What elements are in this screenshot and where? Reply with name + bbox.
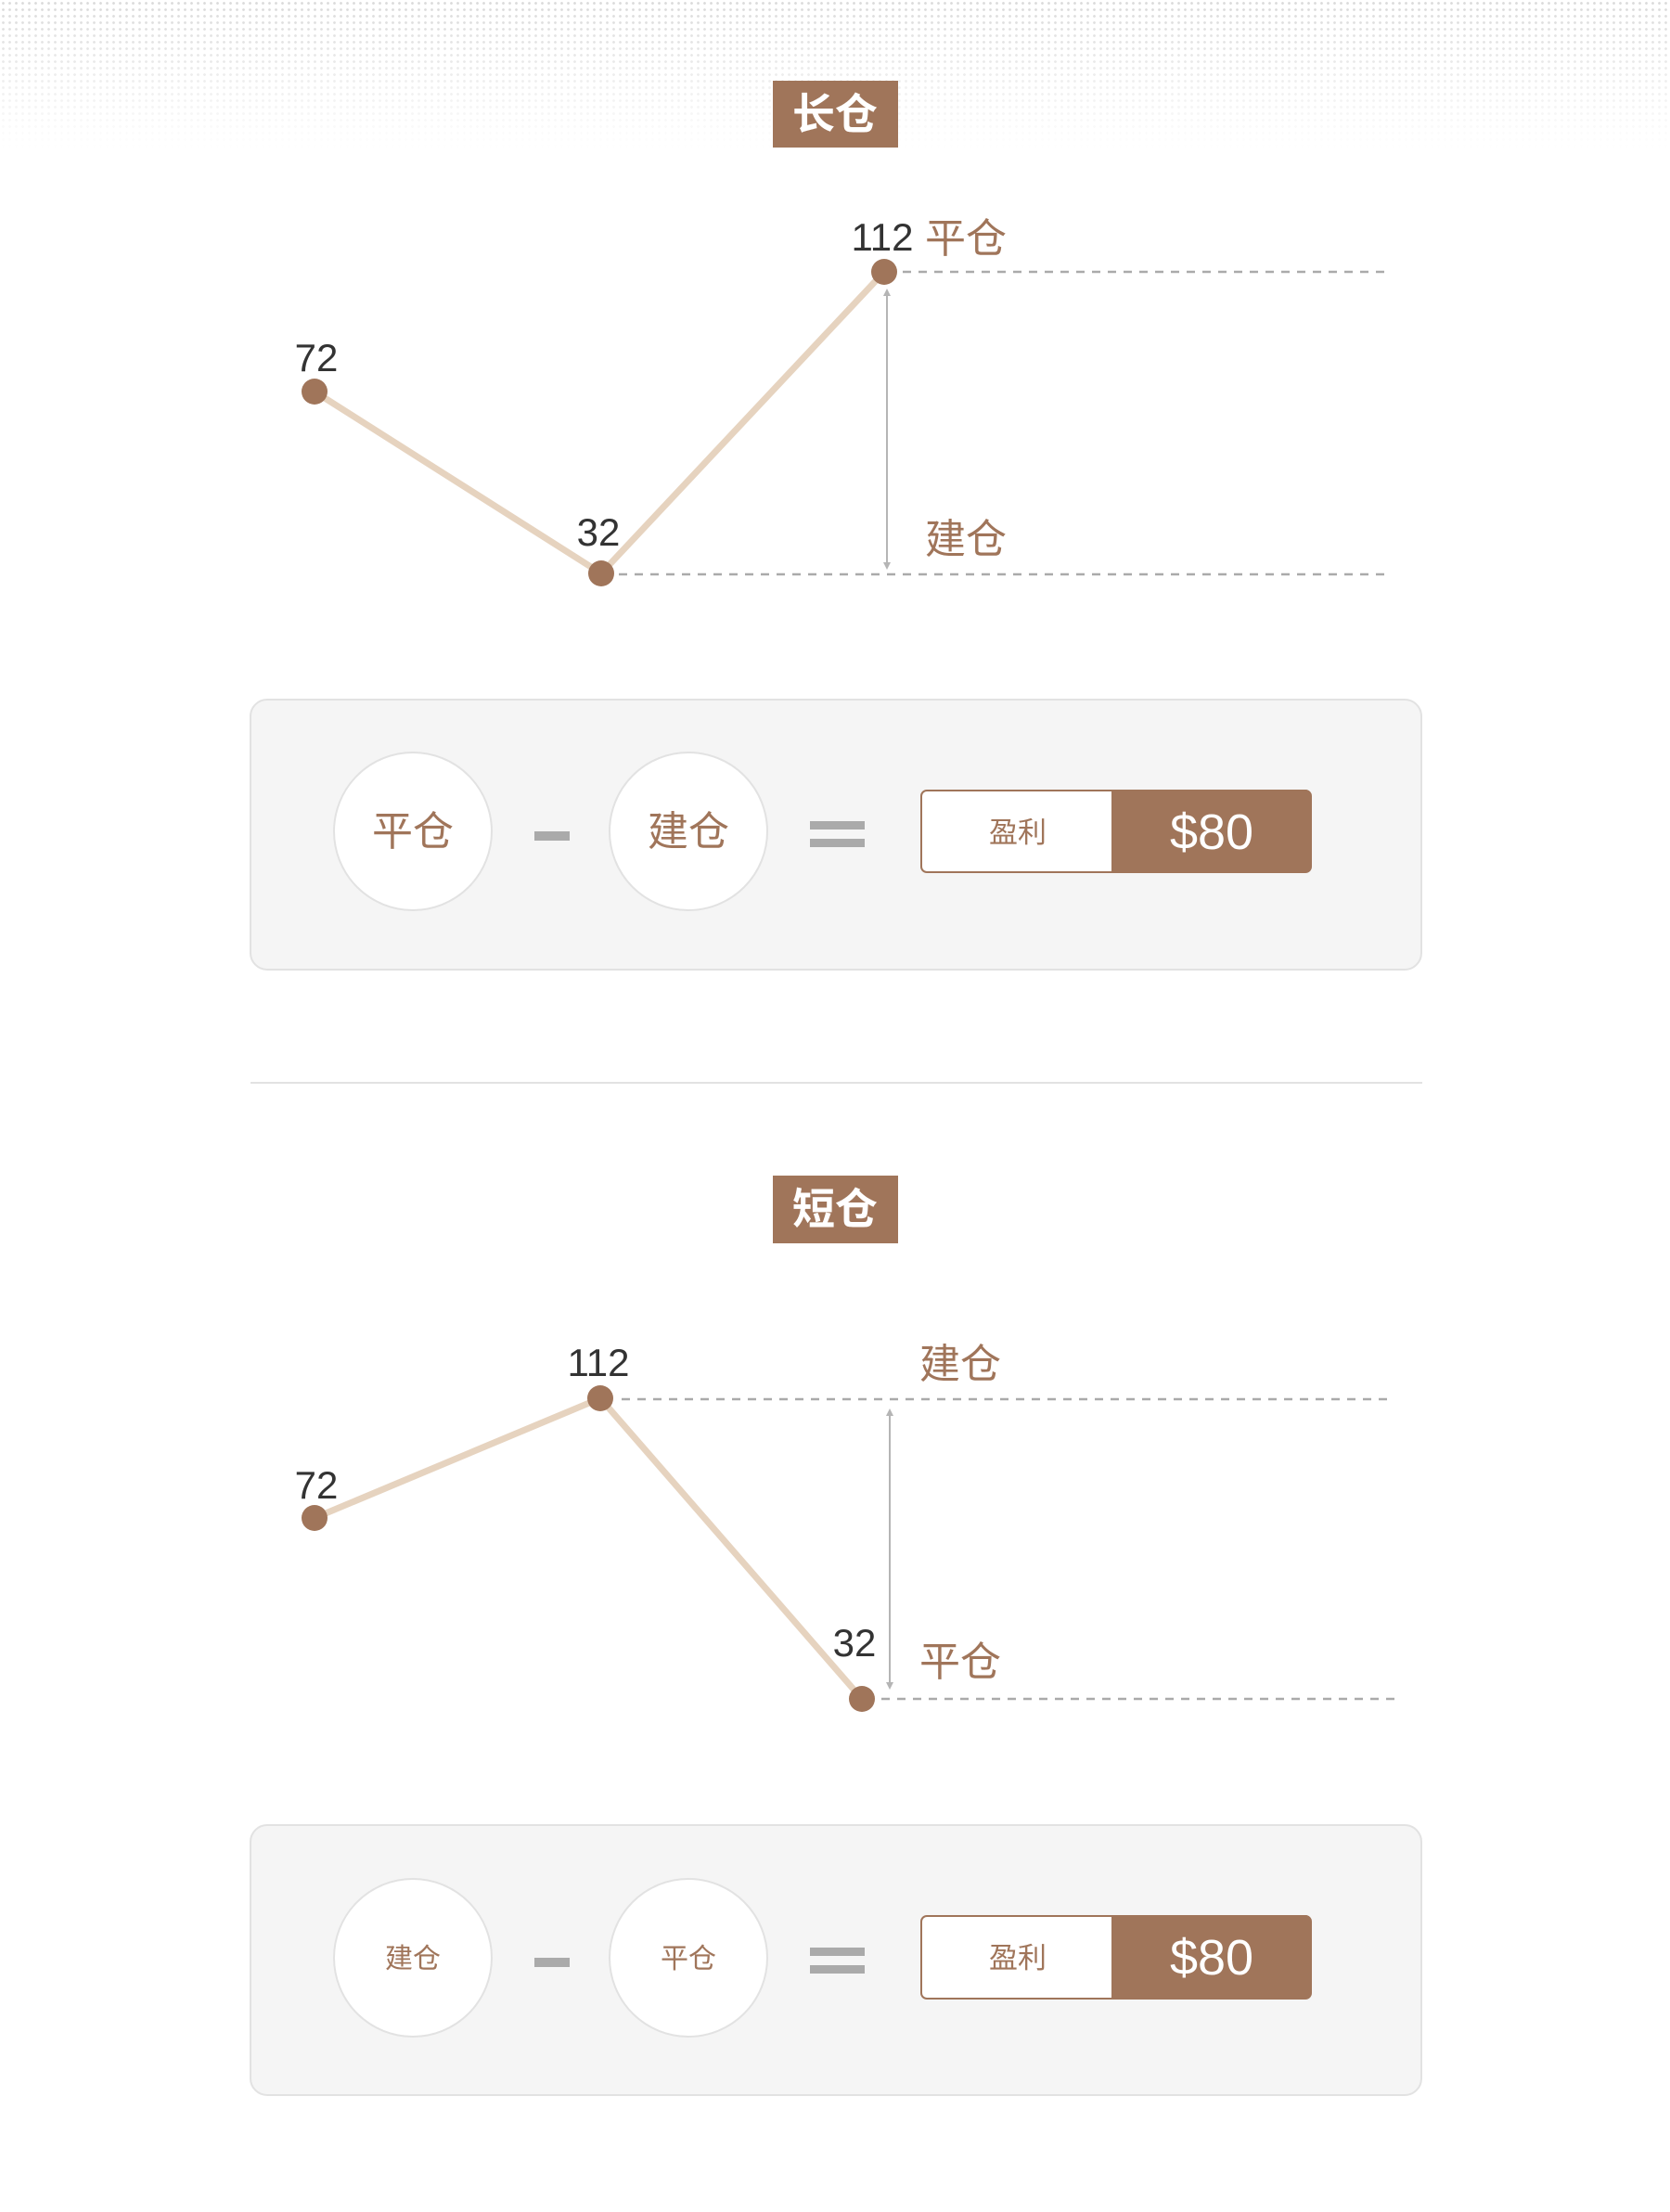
title: short position — [773, 1176, 898, 1243]
panel: long formula: 平仓 — [372, 809, 454, 855]
panel: short formula: 建仓 — [385, 1944, 441, 1974]
panel: short formula: 平仓 — [661, 1944, 716, 1974]
chart: long position: 72 — [295, 336, 338, 379]
title: long position — [773, 81, 898, 148]
chart: long position: 平仓 — [925, 216, 1007, 262]
arrow: short range — [889, 1412, 891, 1686]
chart: short position: 建仓 — [919, 1342, 1001, 1387]
panel: short formula: $80 — [1170, 1930, 1253, 1986]
chart: short position: 72 — [295, 1463, 338, 1507]
title: short position: 短仓 — [792, 1185, 878, 1233]
chart: long position: 32 — [577, 510, 620, 554]
panel: long formula — [250, 700, 1421, 970]
panel: long formula: 建仓 — [648, 809, 729, 855]
panel: short formula — [250, 1825, 1421, 2095]
chart: long position: 建仓 — [925, 517, 1007, 562]
chart: short position: 112 — [568, 1341, 629, 1384]
panel: long formula: $80 — [1170, 804, 1253, 860]
panel: short formula: 盈利 — [989, 1942, 1047, 1974]
chart: short position: 32 — [833, 1621, 876, 1665]
arrow: long range — [886, 292, 888, 566]
panel: long formula: 盈利 — [989, 817, 1047, 849]
background dot pattern — [2, 2, 1667, 115]
chart: long position: 112 — [852, 215, 913, 259]
title: long position: 长仓 — [792, 90, 878, 138]
chart: short position: 平仓 — [919, 1640, 1001, 1685]
chart: short position — [295, 1341, 1398, 1712]
chart: long position — [295, 215, 1387, 586]
